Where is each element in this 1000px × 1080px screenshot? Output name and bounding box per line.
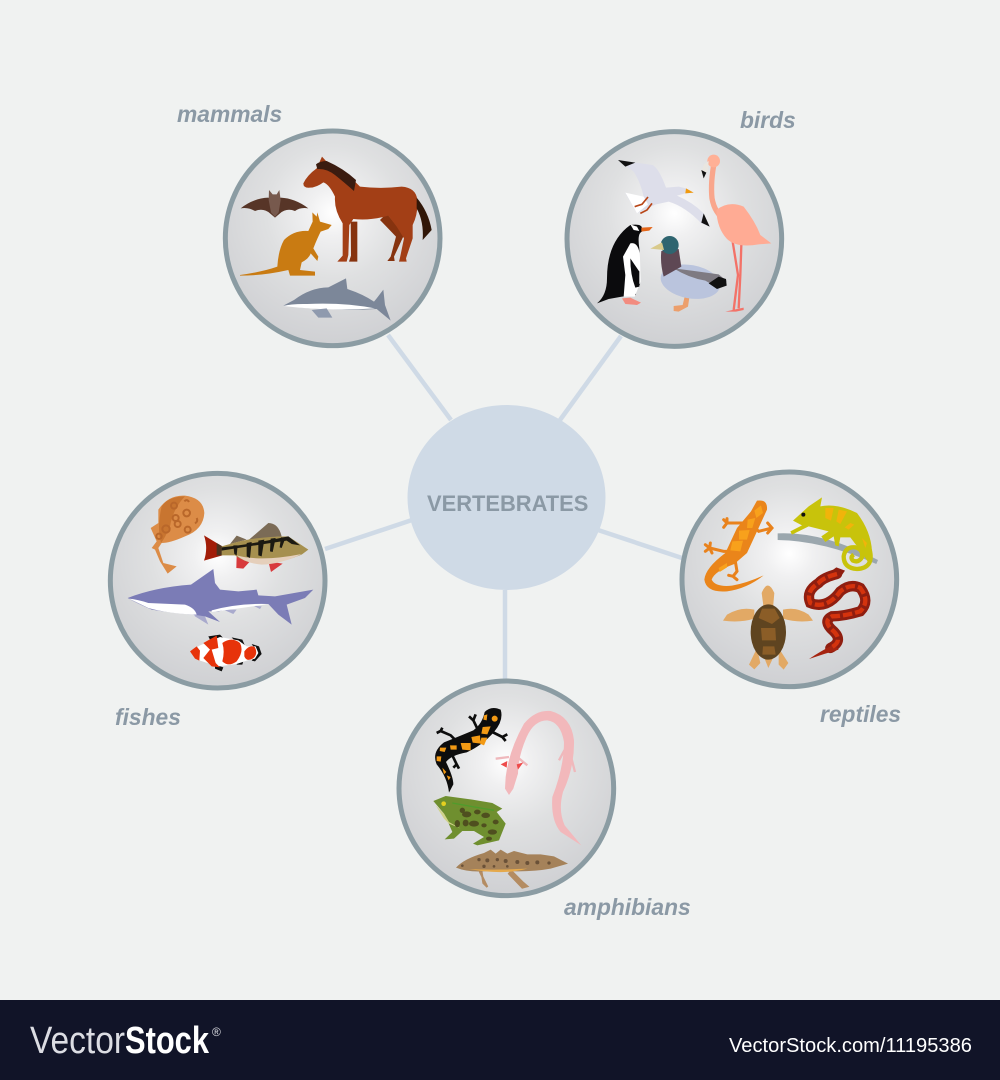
panel: fishes (110, 473, 325, 688)
icon: shark (128, 569, 313, 625)
logo: VectorStock: Vector (30, 1020, 125, 1062)
image id text: VectorStock.com/11195386 (729, 1035, 972, 1057)
icon: pink axolotl (496, 711, 581, 845)
icon: snake (809, 567, 865, 659)
center node: vertebrates (408, 405, 606, 590)
icon: gecko (704, 500, 772, 592)
logo: VectorStock: Stock (125, 1020, 210, 1062)
heading: amphibians: amphibians (564, 894, 691, 920)
heading: birds: birds (740, 107, 796, 133)
heading: fishes: fishes (115, 704, 181, 730)
icon: seagull (618, 160, 710, 227)
icon: frog (433, 796, 506, 845)
footer band (0, 1000, 1000, 1080)
panel: mammals (225, 131, 440, 346)
logo: VectorStock: ® (212, 1025, 221, 1039)
center node: vertebrates: VERTEBRATES (427, 491, 588, 516)
icon: perch (204, 523, 308, 572)
panel: amphibians (399, 681, 614, 896)
connector lines (325, 335, 682, 680)
logo: VectorStock (30, 1020, 221, 1062)
icon: kangaroo (240, 212, 332, 276)
icon: duck (650, 236, 727, 312)
icon: newt (456, 850, 568, 888)
panel: birds (567, 132, 782, 346)
icon: bat (241, 190, 308, 218)
icon: branch (778, 533, 878, 564)
panel: reptiles (682, 472, 897, 687)
icon: dolphin (283, 278, 391, 321)
heading: mammals: mammals (177, 101, 282, 127)
icon: flatfish (151, 496, 204, 574)
icon: horse (303, 157, 432, 262)
icon: clownfish (190, 635, 262, 671)
icon: turtle (723, 585, 813, 670)
icon: chameleon (790, 497, 872, 569)
heading: reptiles: reptiles (820, 701, 901, 727)
icon: fire salamander (435, 708, 507, 793)
icon: flamingo (701, 155, 771, 312)
icon: penguin (597, 224, 653, 305)
